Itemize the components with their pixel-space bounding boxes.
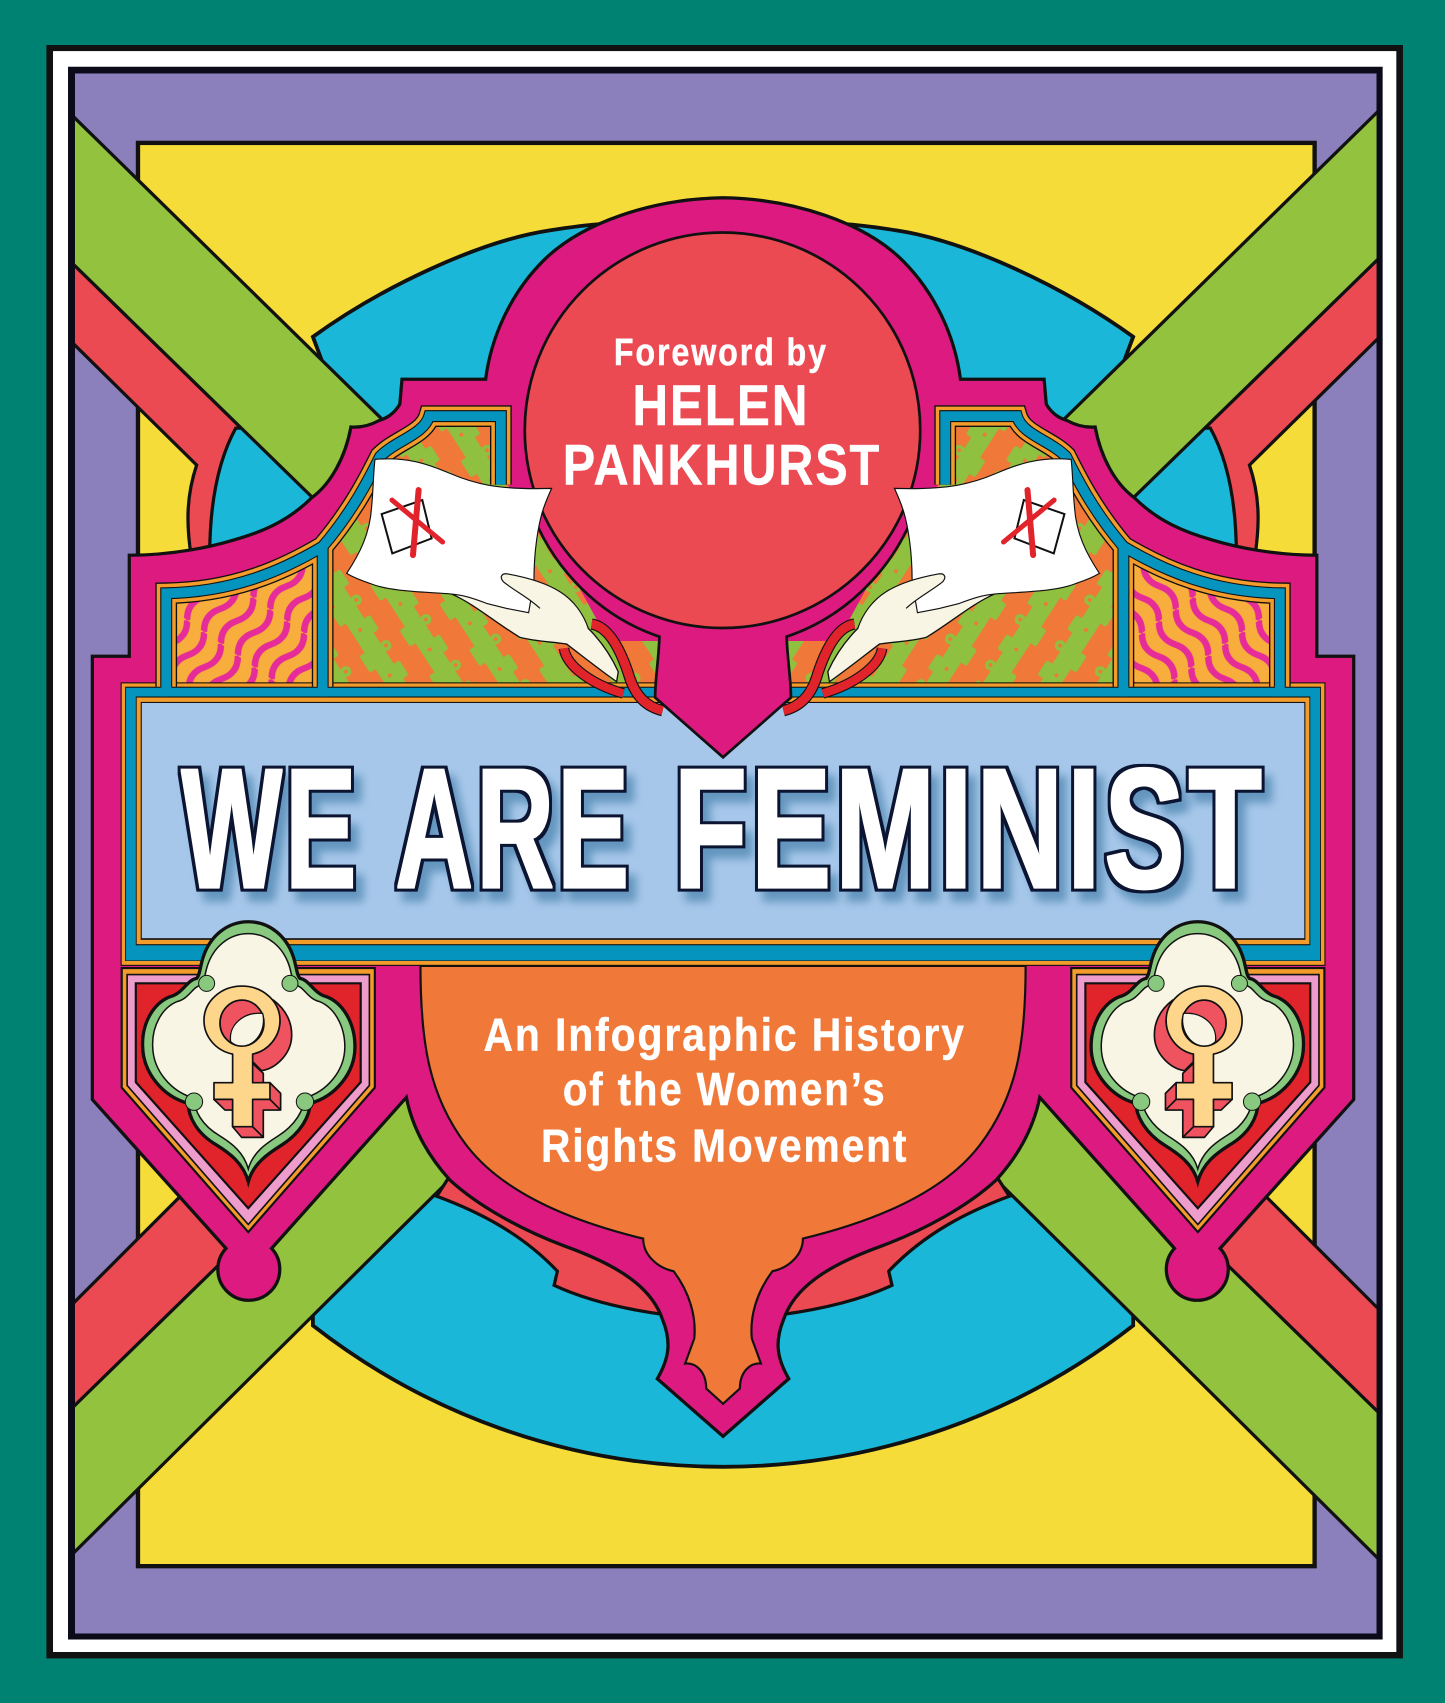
wave pattern panel xyxy=(166,547,323,692)
mirrored ornamental panels xyxy=(788,427,1270,682)
quatrefoil and female symbol xyxy=(143,922,355,1182)
mirrored emblem panel xyxy=(1071,922,1324,1232)
title: WE xyxy=(181,734,360,925)
yellow field xyxy=(138,143,1315,1566)
magenta central shield xyxy=(92,198,1354,1436)
red flare behind bowl xyxy=(437,1169,674,1315)
subtitle line three: Rights Movement xyxy=(541,1119,908,1171)
blue upper arc xyxy=(310,222,1136,418)
left hand and ballot xyxy=(347,459,663,711)
green ribbon top xyxy=(60,103,391,511)
left ribbons xyxy=(60,103,674,1567)
thumb outline xyxy=(501,574,588,628)
title xyxy=(181,734,1266,925)
female symbol extrusion xyxy=(214,1000,292,1137)
mirrored arched rails xyxy=(945,416,1280,696)
author surname: PANKHURST xyxy=(563,434,881,498)
orange bowl xyxy=(420,966,1026,1404)
thumb xyxy=(501,574,588,628)
shield: red layer xyxy=(136,983,361,1208)
green ribbon bottom xyxy=(60,1076,478,1567)
ballot checkbox xyxy=(382,500,432,553)
quatrefoil green outline xyxy=(143,922,355,1182)
lower cuff ribbon xyxy=(564,648,623,693)
author first name: HELEN xyxy=(632,374,809,438)
red X vote xyxy=(392,490,443,555)
female symbol face xyxy=(204,986,280,1127)
red ribbon bottom xyxy=(60,1181,282,1420)
red circle xyxy=(525,233,920,628)
blue lower arc xyxy=(313,1195,1133,1467)
subtitle line one: An Infographic History xyxy=(483,1009,966,1061)
shield: orange border xyxy=(122,968,375,1232)
mirrored hand and ballot xyxy=(783,459,1099,711)
upper cuff ribbon xyxy=(592,624,663,711)
quatrefoil knobs xyxy=(185,975,314,1110)
title: ARE xyxy=(395,734,632,925)
shield: pink layer xyxy=(127,975,369,1224)
ring and drop outline xyxy=(538,526,908,760)
left arched rails xyxy=(166,416,501,696)
ballot paper xyxy=(347,459,552,613)
hand fingers and palm xyxy=(452,581,618,682)
title banner with nested rails xyxy=(121,682,1325,966)
red ribbon top xyxy=(60,251,326,556)
quatrefoil cream interior xyxy=(153,934,345,1169)
stripe pattern panel xyxy=(323,416,663,692)
foreword line: Foreword by xyxy=(614,332,828,374)
female symbol hole xyxy=(230,1013,264,1046)
blue arch lobe xyxy=(210,428,369,556)
left ornamental panels xyxy=(166,416,663,692)
magenta ring and drop xyxy=(540,519,907,756)
subtitle line two: of the Women’s xyxy=(563,1063,887,1115)
left emblem panel xyxy=(122,922,375,1232)
mirrored ribbons on the right xyxy=(772,103,1386,1567)
